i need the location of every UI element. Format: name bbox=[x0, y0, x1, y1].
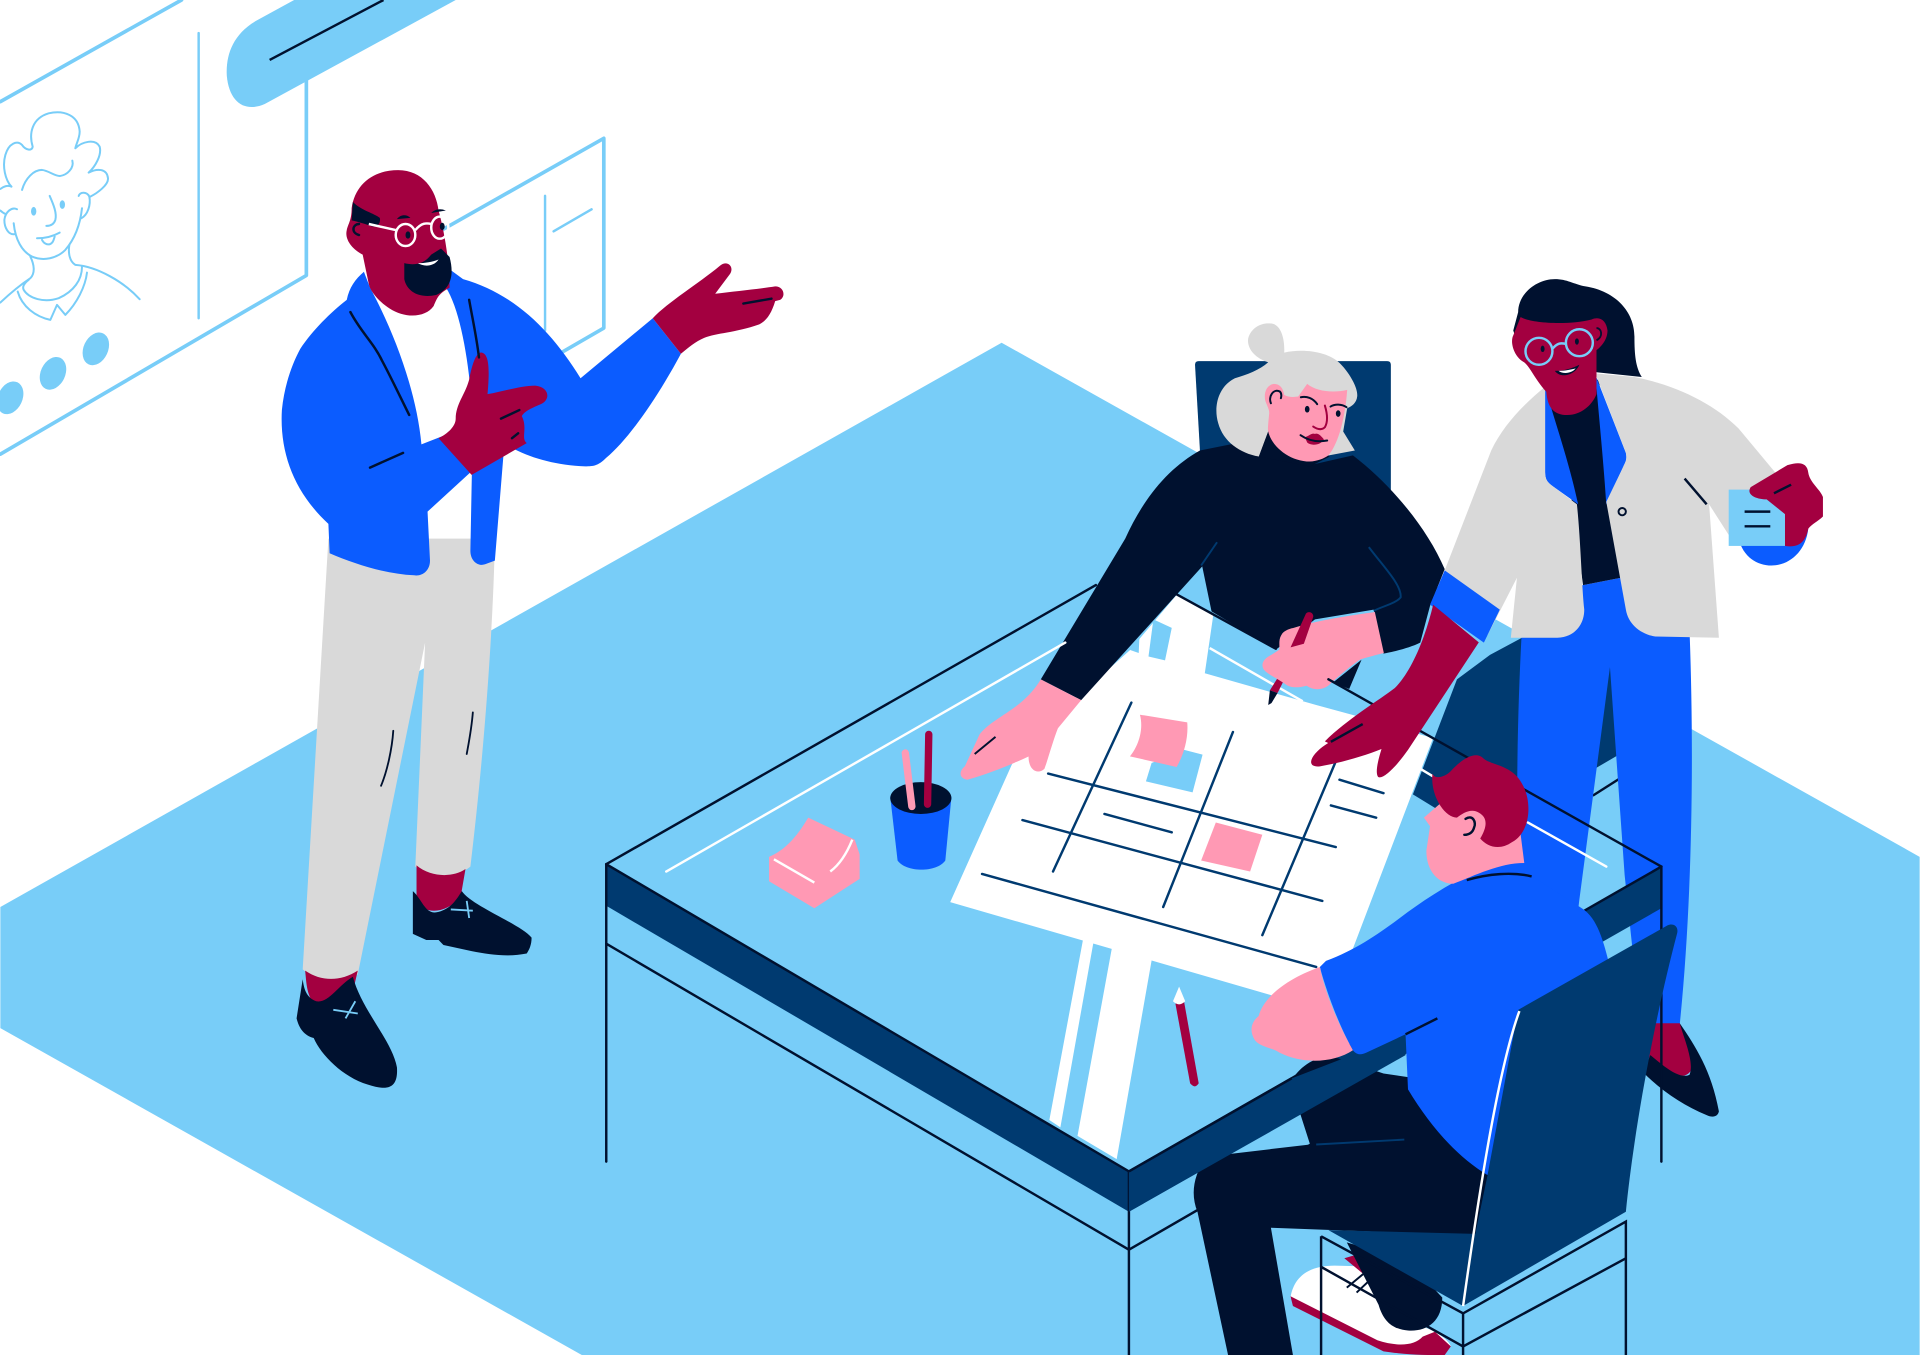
shirt bbox=[1320, 859, 1610, 1175]
blue sticky note bbox=[1146, 750, 1203, 792]
collar bbox=[1467, 874, 1532, 880]
shoe bbox=[1643, 1023, 1719, 1117]
grid lines bbox=[982, 703, 1384, 967]
head bbox=[1216, 323, 1357, 467]
eyes and brows bbox=[397, 209, 446, 239]
board bbox=[950, 595, 1433, 998]
sole bbox=[1290, 1296, 1451, 1355]
sticky notes on board bbox=[1130, 715, 1203, 792]
hand bbox=[1262, 612, 1384, 689]
lower pen bbox=[1270, 677, 1284, 693]
upper pen bbox=[1291, 612, 1313, 647]
glasses bbox=[1526, 329, 1593, 365]
ear detail bbox=[1270, 391, 1281, 403]
mouth bbox=[418, 259, 439, 266]
sleeve seams bbox=[1201, 542, 1401, 611]
socks bbox=[305, 865, 465, 1006]
blouse panels bbox=[1545, 375, 1626, 504]
forearm bbox=[1252, 967, 1353, 1061]
sock bbox=[1344, 1255, 1365, 1275]
eyes bbox=[1305, 406, 1341, 417]
t-shirt bbox=[1545, 379, 1621, 585]
finger line bbox=[975, 737, 995, 754]
trousers bbox=[1194, 1055, 1518, 1355]
floor bbox=[0, 343, 1920, 1355]
jacket left bbox=[1445, 387, 1584, 638]
jacket seams bbox=[350, 299, 771, 468]
ear detail bbox=[1596, 328, 1601, 340]
seated man's chair bbox=[1321, 924, 1677, 1355]
lips bbox=[1305, 434, 1324, 445]
note lines bbox=[1745, 512, 1770, 526]
lip line bbox=[1301, 435, 1327, 441]
table front edge line bbox=[1129, 1078, 1292, 1171]
blue cup behind note bbox=[1738, 520, 1808, 566]
smile highlight bbox=[1559, 368, 1576, 373]
pencil cup bbox=[890, 731, 951, 870]
paper highlight bbox=[1210, 648, 1303, 701]
face bbox=[1265, 384, 1347, 462]
standing woman bbox=[1413, 279, 1823, 1117]
pink sticky note bbox=[1201, 823, 1262, 872]
wall board frame bbox=[0, 0, 306, 454]
ankle bbox=[1645, 1023, 1692, 1076]
seated man bbox=[1129, 755, 1610, 1355]
right hand with pen bbox=[1262, 612, 1384, 705]
knee seam bbox=[1316, 1140, 1404, 1144]
glass table top bbox=[606, 585, 1661, 1355]
right shoe bbox=[413, 891, 532, 955]
knuckle line bbox=[1331, 724, 1363, 742]
table outlines bbox=[606, 585, 1661, 1355]
center chair back bbox=[1195, 361, 1391, 508]
torso and arm bbox=[1041, 438, 1445, 700]
left shoe bbox=[297, 977, 397, 1088]
button bbox=[1619, 508, 1626, 515]
note hand bbox=[1749, 463, 1823, 546]
hair bbox=[1216, 323, 1357, 457]
table front re-overlay bbox=[1129, 1034, 1406, 1212]
shoe of seated man bbox=[1290, 1242, 1451, 1355]
reaching maroon arm and cuff bbox=[1311, 570, 1500, 777]
neck and face bbox=[1424, 796, 1524, 884]
laces bbox=[1347, 1269, 1377, 1293]
ear detail bbox=[353, 224, 359, 235]
sticky note pad bbox=[769, 818, 860, 908]
hair bbox=[1513, 279, 1642, 377]
seated woman bbox=[961, 323, 1445, 780]
chair highlight bbox=[1463, 1011, 1519, 1306]
trouser creases bbox=[381, 712, 473, 786]
pencil on table bbox=[1173, 987, 1199, 1086]
jacket left side bbox=[282, 272, 472, 575]
shoe laces bbox=[333, 901, 473, 1018]
white shirt bbox=[363, 282, 474, 538]
dark wedge under hand bbox=[1333, 660, 1362, 689]
ceiling light bbox=[227, 0, 456, 107]
trousers bbox=[303, 539, 495, 982]
glass highlights bbox=[666, 643, 1606, 872]
wall dots bbox=[0, 328, 114, 419]
nose bbox=[1313, 406, 1327, 429]
board stand bbox=[1049, 936, 1152, 1159]
ear detail bbox=[1464, 817, 1475, 835]
jacket right bbox=[1595, 373, 1781, 638]
chair back bbox=[1328, 924, 1677, 1306]
chair seat behind bbox=[1413, 636, 1628, 845]
side hair bbox=[352, 202, 380, 227]
arm and hand bbox=[1311, 605, 1479, 777]
brows bbox=[1301, 397, 1347, 407]
lower leg bbox=[1347, 1242, 1442, 1331]
jacket crease bbox=[1685, 479, 1707, 504]
trousers bbox=[1517, 575, 1692, 1025]
drafting board bbox=[950, 595, 1433, 1159]
neck bbox=[1259, 432, 1330, 467]
blue gaps in board bbox=[1149, 619, 1172, 660]
sleeve table line bbox=[1406, 1018, 1437, 1034]
hair bbox=[1432, 755, 1528, 847]
face bbox=[1512, 317, 1608, 415]
knuckle line bbox=[1774, 485, 1791, 493]
pen tip bbox=[1268, 690, 1278, 705]
left hand bbox=[961, 679, 1081, 780]
head bbox=[346, 170, 450, 316]
table line between legs bbox=[1593, 778, 1620, 796]
sticky note bbox=[1729, 490, 1785, 546]
eyes and mouth bbox=[1541, 338, 1579, 375]
chair frame bbox=[1321, 1222, 1626, 1355]
pointing hand bbox=[653, 263, 783, 354]
glasses bbox=[369, 217, 448, 246]
gesturing hand bbox=[439, 353, 547, 475]
beard bbox=[404, 248, 452, 296]
window panel bbox=[429, 138, 604, 355]
pink sticky note on blue bbox=[1130, 715, 1187, 767]
jacket right side and arm bbox=[443, 269, 681, 565]
presenter man bbox=[282, 170, 783, 1088]
table edge bbox=[606, 864, 1661, 1212]
portrait sketch bbox=[0, 112, 140, 320]
